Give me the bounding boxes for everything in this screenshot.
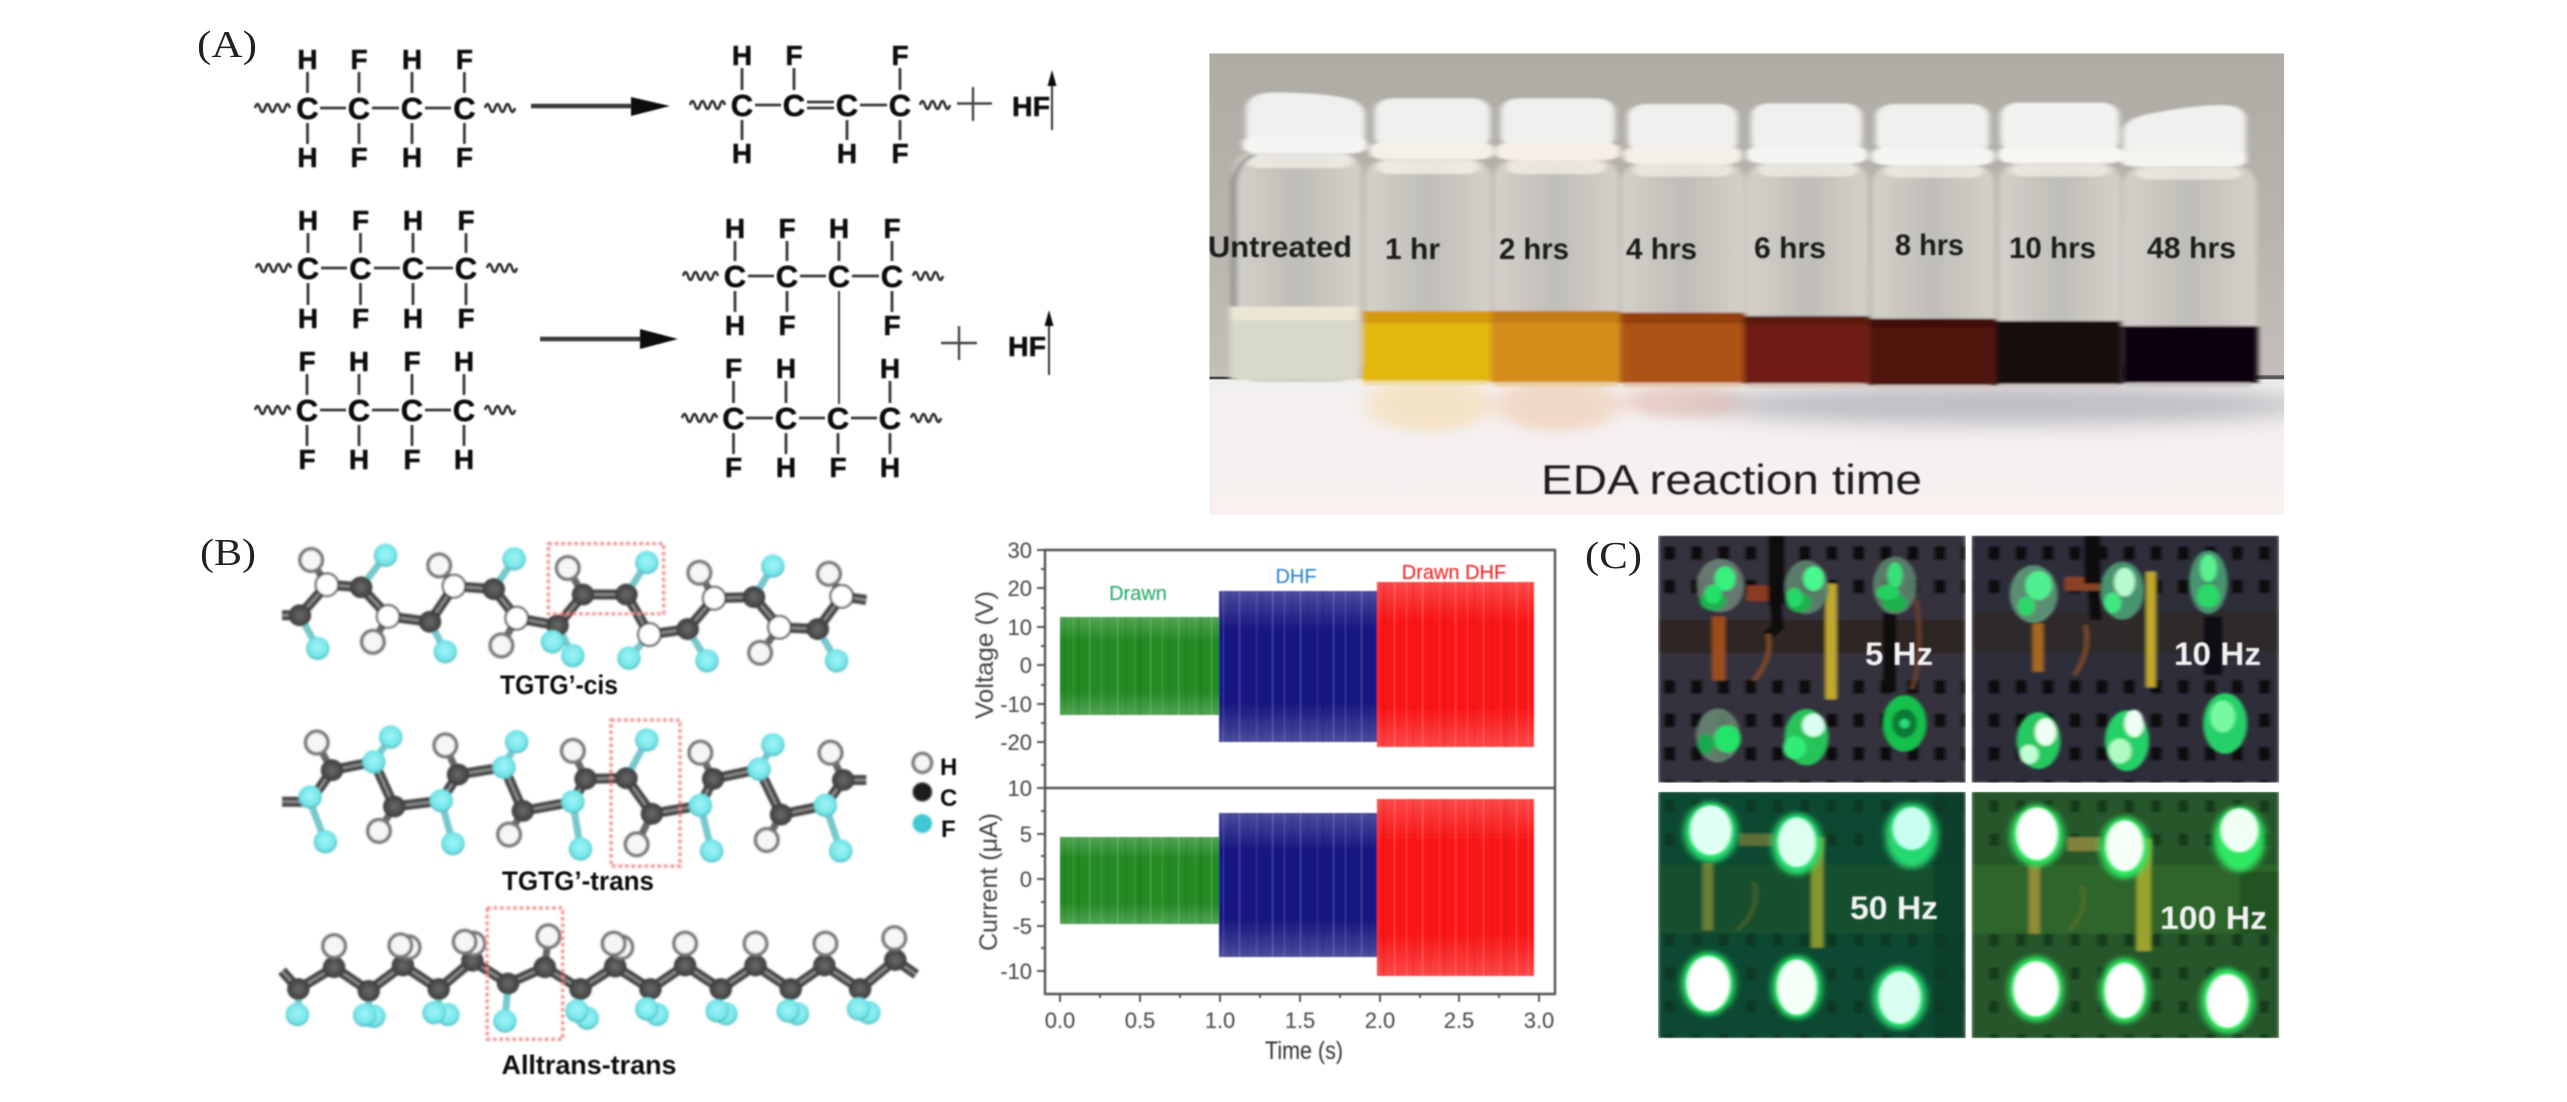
- current signal: DHF: [1219, 813, 1377, 957]
- vial: 48 hrs: [2121, 105, 2258, 387]
- molecule: TGTG'-cis: [282, 544, 866, 672]
- chain: product with double bond: F: [891, 40, 909, 71]
- y tick labels: current: 5: [1020, 822, 1032, 847]
- chain: reactant lower: H: [349, 346, 369, 377]
- chain: reactant upper: F: [457, 303, 475, 334]
- chain: crosslinked product lower: H: [776, 452, 796, 483]
- panel A: vial photograph: [1208, 53, 2317, 515]
- HF gas product 1: [1012, 70, 1056, 130]
- photo: 5 Hz LEDs: [1658, 536, 1966, 783]
- chain: crosslinked product upper: [683, 213, 943, 341]
- vial: 1 hr: [1362, 98, 1494, 385]
- chain: crosslinked product upper: H: [725, 310, 745, 341]
- chain: reactant top: C: [296, 91, 319, 126]
- y tick labels: voltage: 30: [1008, 538, 1032, 563]
- chain: crosslinked product upper: C: [724, 259, 746, 294]
- chain: product with double bond: H: [732, 138, 752, 169]
- x tick labels: 2.5: [1444, 1008, 1474, 1033]
- molecule: TGTG'-trans: [282, 725, 866, 863]
- chain: reactant lower: F: [403, 346, 421, 377]
- chain: reactant top: H: [297, 44, 318, 75]
- x tick labels: 1.5: [1285, 1008, 1315, 1033]
- voltage signal: DHF: [1219, 591, 1377, 742]
- chain: crosslinked product upper: H: [725, 213, 745, 244]
- chain: reactant lower: H: [349, 444, 369, 475]
- chain: reactant top: F: [350, 44, 368, 75]
- chain: crosslinked product lower: C: [775, 401, 797, 436]
- chain: product with double bond: C: [836, 88, 858, 123]
- chain: reactant lower: F: [403, 444, 421, 475]
- frequency label: 100 Hz: 100 Hz: [2160, 900, 2267, 936]
- chain: reactant top: H: [297, 142, 318, 173]
- chain: crosslinked product upper: F: [883, 310, 901, 341]
- y tick labels: voltage: 0: [1020, 653, 1032, 678]
- chain: crosslinked product lower: F: [725, 452, 742, 483]
- x tick labels: 1.0: [1205, 1008, 1235, 1033]
- molecule label: cis: TGTG’-cis: [500, 670, 618, 700]
- chain: crosslinked product lower: F: [829, 452, 847, 483]
- chain: reactant top: H: [402, 142, 422, 173]
- series label: Drawn: Drawn: [1109, 583, 1167, 605]
- y tick labels: voltage: -20: [1000, 730, 1032, 755]
- photo caption: EDA reaction time: [1541, 456, 1922, 503]
- chain: product with double bond: H: [732, 40, 752, 71]
- chain: crosslinked product upper: H: [829, 213, 849, 244]
- frequency label: 50 Hz: 50 Hz: [1850, 890, 1938, 926]
- chain: reactant upper: F: [352, 205, 369, 236]
- chain: reactant upper: C: [349, 251, 372, 286]
- vial time labels: 4 hrs: [1626, 233, 1697, 266]
- y axis title: voltage: Voltage (V): [971, 591, 999, 719]
- panel label A: (A): [197, 24, 257, 66]
- chain: crosslinked product upper: C: [776, 259, 798, 294]
- legend atoms: [913, 753, 932, 833]
- chain: reactant top: C: [401, 91, 423, 126]
- plus sign 1: [957, 87, 992, 121]
- chain: crosslinked product upper: F: [883, 213, 901, 244]
- chain: reactant upper: H: [403, 205, 423, 236]
- chain: crosslinked product lower: F: [725, 353, 742, 384]
- frequency label: 5 Hz: 5 Hz: [1865, 636, 1933, 672]
- chain: reactant lower: C: [401, 393, 423, 428]
- chain: reactant top: C: [348, 91, 370, 126]
- chain: reactant lower: C: [348, 393, 370, 428]
- y tick labels: voltage: -10: [1000, 692, 1032, 717]
- x tick labels: 2.0: [1365, 1008, 1395, 1033]
- molecule label: all-trans: Alltrans-trans: [502, 1050, 676, 1080]
- vial time labels: Untreated: [1208, 231, 1352, 264]
- chain: reactant upper: C: [297, 251, 319, 286]
- highlight box: all-trans unit: [487, 908, 563, 1039]
- chain: crosslinked product upper: C: [881, 259, 903, 294]
- chain: reactant lower: C: [453, 393, 475, 428]
- current signal: drawn: [1060, 837, 1219, 924]
- photo: 50 Hz LEDs: [1658, 792, 1966, 1038]
- chain: crosslinked product upper: C: [828, 259, 850, 294]
- photo: 10 Hz LEDs: [1972, 536, 2279, 783]
- arrow: reaction 1: [531, 97, 670, 116]
- chain: reactant upper: [256, 205, 517, 334]
- y tick labels: current: 0: [1020, 867, 1032, 892]
- vial time labels: 8 hrs: [1895, 229, 1964, 262]
- highlight box: cis unit: [548, 544, 664, 614]
- current signal: drawn DHF: [1377, 799, 1534, 976]
- chain: product with double bond: F: [785, 40, 803, 71]
- x tick labels: 3.0: [1524, 1008, 1554, 1033]
- photo: 100 Hz LEDs: [1972, 792, 2279, 1038]
- legend labels: [940, 754, 957, 843]
- molecule: all-trans: [282, 925, 916, 1033]
- y tick labels: current: -10: [1000, 959, 1032, 984]
- y tick labels: current: [1000, 776, 1032, 984]
- chain: reactant upper: C: [455, 251, 477, 286]
- chain: product with double bond: F: [891, 138, 909, 169]
- y tick labels: voltage: [1000, 538, 1032, 755]
- y tick labels: voltage: 20: [1008, 576, 1032, 601]
- chain: reactant lower: C: [296, 393, 318, 428]
- vial: 2 hrs: [1491, 98, 1620, 387]
- panel A: reaction schemes: [255, 40, 1056, 483]
- vial time labels: 10 hrs: [2009, 232, 2096, 265]
- chain: product with double bond: H: [837, 138, 857, 169]
- panel B: molecular conformations: [282, 544, 957, 1080]
- chain: reactant lower: [255, 346, 515, 475]
- molecule label: trans: TGTG’-trans: [502, 866, 654, 896]
- chain: reactant top: H: [402, 44, 422, 75]
- y tick labels: current: -5: [1012, 914, 1032, 939]
- composite figure: [198, 30, 2284, 1076]
- panel C: LED photographs: [1658, 536, 2279, 1038]
- vial: 4 hrs: [1620, 104, 1745, 387]
- vial time labels: [1208, 229, 2236, 266]
- vial time labels: 48 hrs: [2147, 232, 2236, 265]
- chain: crosslinked product lower: H: [776, 353, 796, 384]
- vial time labels: 6 hrs: [1754, 232, 1826, 265]
- plus sign 2: [941, 326, 977, 360]
- chain: product with double bond: C: [783, 88, 805, 123]
- arrow: reaction 2: [540, 329, 678, 349]
- chain: reactant top: F: [350, 142, 368, 173]
- legend labels: C: [940, 785, 957, 812]
- chain: crosslinked product lower: H: [880, 353, 900, 384]
- photo background: [1209, 53, 2317, 515]
- chain: product with double bond: C: [889, 88, 911, 123]
- vial: 8 hrs: [1870, 104, 1996, 390]
- y tick labels: current: 10: [1008, 776, 1032, 801]
- highlight box: trans unit: [611, 720, 680, 866]
- chain: reactant upper: H: [298, 205, 318, 236]
- vial time labels: 1 hr: [1385, 233, 1440, 266]
- panel label C: (C): [1585, 535, 1642, 577]
- panel B: voltage and current chart: [971, 538, 1555, 1065]
- y axis title: current: Current (μA): [975, 813, 1003, 951]
- chain: product with double bond: [690, 40, 950, 169]
- chain: crosslinked product upper: F: [778, 213, 796, 244]
- chain: reactant lower: F: [298, 346, 316, 377]
- vials: [1230, 92, 2258, 390]
- panel label B: (B): [200, 532, 256, 574]
- legend labels: F: [941, 816, 956, 843]
- chain: reactant lower: H: [454, 444, 474, 475]
- chain: reactant top: C: [453, 91, 476, 126]
- chain: crosslinked product lower: C: [722, 401, 745, 436]
- series label: Drawn DHF: Drawn DHF: [1402, 562, 1506, 584]
- HF gas product 2: [1008, 310, 1054, 375]
- chain: crosslinked product lower: C: [827, 401, 849, 436]
- chart axes and frame: [1037, 550, 1555, 1002]
- frequency label: 10 Hz: 10 Hz: [2174, 636, 2261, 672]
- series label: DHF: DHF: [1275, 566, 1317, 588]
- voltage signal: drawn DHF: [1377, 582, 1534, 747]
- chain: reactant lower: F: [298, 444, 316, 475]
- chain: reactant upper: F: [457, 205, 475, 236]
- chain: reactant upper: F: [352, 303, 369, 334]
- x tick labels: 0.0: [1045, 1008, 1075, 1033]
- x tick labels: 0.5: [1125, 1008, 1155, 1033]
- crosslink bond: [838, 291, 840, 404]
- vial: 6 hrs: [1743, 103, 1870, 388]
- chain: crosslinked product lower: H: [880, 452, 900, 483]
- vial: 10 hrs: [1996, 103, 2123, 389]
- chain: product with double bond: C: [731, 88, 753, 123]
- chain: reactant top: F: [456, 142, 473, 173]
- chain: reactant lower: H: [454, 346, 474, 377]
- chain: crosslinked product upper: F: [778, 310, 796, 341]
- vial time labels: 2 hrs: [1499, 233, 1569, 266]
- x axis title: Time (s): [1265, 1037, 1343, 1065]
- chain: reactant top: [255, 44, 515, 173]
- HF gas product 1: HF: [1012, 91, 1050, 122]
- chain: reactant upper: H: [298, 303, 318, 334]
- voltage signal: drawn: [1060, 617, 1219, 715]
- x tick labels: [1045, 1008, 1554, 1033]
- chain: reactant upper: C: [402, 251, 424, 286]
- HF gas product 2: HF: [1008, 331, 1046, 362]
- y tick labels: voltage: 10: [1008, 615, 1032, 640]
- chain: reactant upper: H: [403, 303, 423, 334]
- chain: reactant top: F: [456, 44, 473, 75]
- chain: crosslinked product lower: C: [879, 401, 901, 436]
- chain: crosslinked product lower: [682, 353, 941, 483]
- vial: untreated: [1230, 92, 1367, 382]
- legend labels: H: [940, 754, 957, 781]
